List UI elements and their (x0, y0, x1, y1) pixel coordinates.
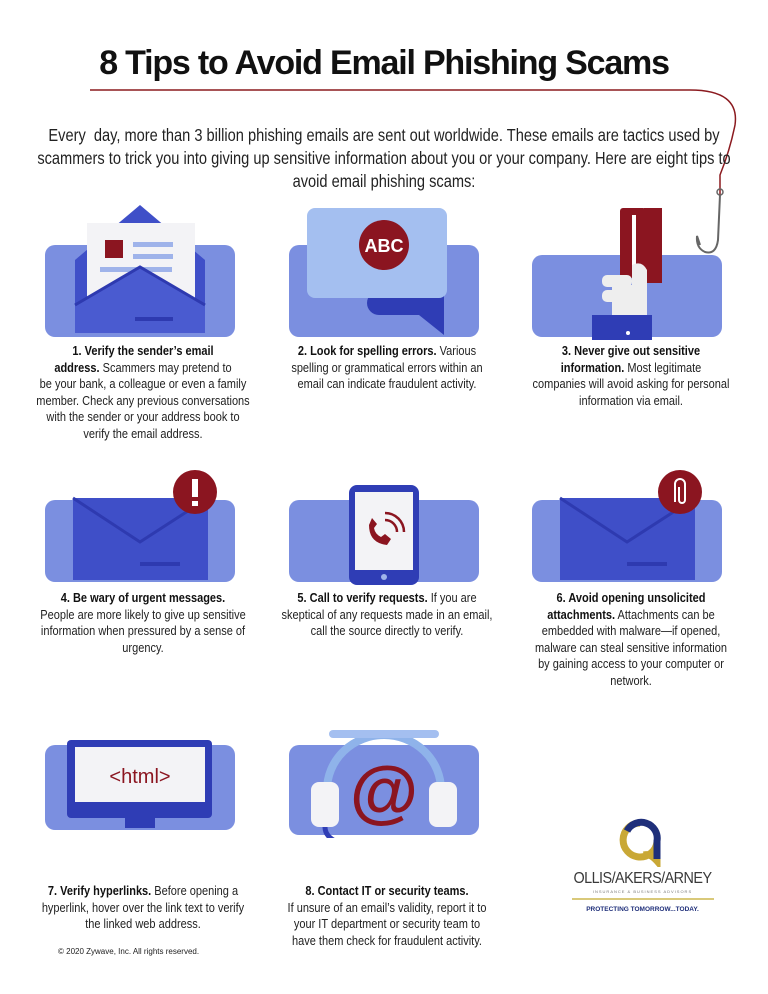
tip 4 text: urgency. (122, 640, 164, 654)
tip 7 text: hyperlink, hover over the link text to verify (42, 900, 244, 914)
tip 6 text: by gaining access to your computer or (538, 657, 724, 671)
tip 4 text: 4. Be wary of urgent messages. (61, 591, 225, 605)
icon 7: monitor html: <html> (109, 766, 171, 788)
tip 2 text (291, 344, 483, 391)
tip 2 text: 2. Look for spelling errors. Various (298, 344, 476, 358)
icon 4: envelope with alert (45, 470, 235, 582)
icon 1: open envelope (45, 205, 235, 337)
logo: PROTECTING TOMORROW...TODAY. (586, 906, 699, 913)
logo: INSURANCE & BUSINESS ADVISORS (593, 889, 692, 894)
tip 1 text: be your bank, a colleague or even a family (40, 377, 246, 391)
tip 4 text (40, 591, 246, 654)
fishing line and hook (90, 89, 736, 254)
copyright: © 2020 Zywave, Inc. All rights reserved. (58, 947, 199, 956)
tip 5 text: 5. Call to verify requests. If you are (297, 591, 477, 605)
logo (572, 818, 714, 913)
tip 2 text: spelling or grammatical errors within an (291, 360, 483, 374)
icon 2: speech bubbles (289, 208, 479, 337)
icon 8: headset @: @ (350, 752, 418, 830)
tip 6 text: 6. Avoid opening unsolicited (557, 591, 705, 605)
icon 8: headset @ (289, 730, 479, 838)
tip 1 text: address. Scammers may pretend to (54, 360, 232, 374)
intro text: Every day, more than 3 billion phishing emails are sent out worldwide. These emails are tactics used by (48, 125, 720, 145)
icon 3: hand with card (532, 208, 722, 340)
intro text: scammers to trick you into giving up sensitive information about you or your company. Here are eight tips to (37, 148, 731, 168)
tip 3 text: 3. Never give out sensitive (562, 344, 700, 358)
tip 6 text: attachments. Attachments can be (547, 608, 715, 622)
tip 3 text (533, 344, 729, 408)
tip 1 text: 1. Verify the sender’s email (72, 344, 214, 358)
logo mark (620, 818, 661, 867)
tip 6 text: embedded with malware—if opened, (542, 624, 720, 638)
tip 6 text: network. (610, 674, 652, 688)
tip 6 text: malware can steal sensitive information (535, 640, 727, 654)
tip 4 text: People are more likely to give up sensitive (40, 608, 246, 622)
tip 4 text: information when pressured by a sense of (41, 624, 245, 638)
tip 8 text (288, 884, 486, 948)
tip 2 text: email can indicate fraudulent activity. (298, 377, 476, 391)
tip 5 text: skeptical of any requests made in an email, (282, 608, 492, 622)
tip 3 text: companies will avoid asking for personal (533, 377, 729, 391)
icon 6: envelope with paperclip (532, 470, 722, 582)
tip 3 text: information. Most legitimate (561, 360, 701, 374)
tip 8 text: your IT department or security team to (294, 917, 480, 931)
tip 8 text: If unsure of an email’s validity, report it to (288, 900, 486, 914)
tip 5 text (282, 591, 492, 638)
tip 7 text (42, 884, 244, 931)
tip 8 text: 8. Contact IT or security teams. (305, 884, 469, 898)
icon 7: monitor html (45, 740, 235, 830)
tip 7 text: the linked web address. (85, 917, 201, 931)
tip 1 text (36, 344, 250, 440)
tip 1 text: with the sender or your address book to (46, 410, 240, 424)
tip 1 text: member. Check any previous conversations (36, 394, 250, 408)
tip 7 text: 7. Verify hyperlinks. Before opening a (48, 884, 238, 898)
tip 3 text: information via email. (579, 394, 683, 408)
tip 8 text: have them check for fraudulent activity. (292, 934, 482, 948)
intro text (37, 125, 731, 191)
tip 1 text: verify the email address. (83, 426, 203, 440)
icon 5: phone (289, 485, 479, 585)
icon 2: speech bubbles: ABC (364, 236, 404, 256)
intro text: avoid email phishing scams: (293, 171, 475, 191)
title: 8 Tips to Avoid Email Phishing Scams (99, 44, 669, 82)
tip 5 text: call the source directly to verify. (311, 624, 463, 638)
tip 6 text (535, 591, 727, 688)
logo text: OLLIS/AKERS/ARNEY (573, 870, 712, 887)
